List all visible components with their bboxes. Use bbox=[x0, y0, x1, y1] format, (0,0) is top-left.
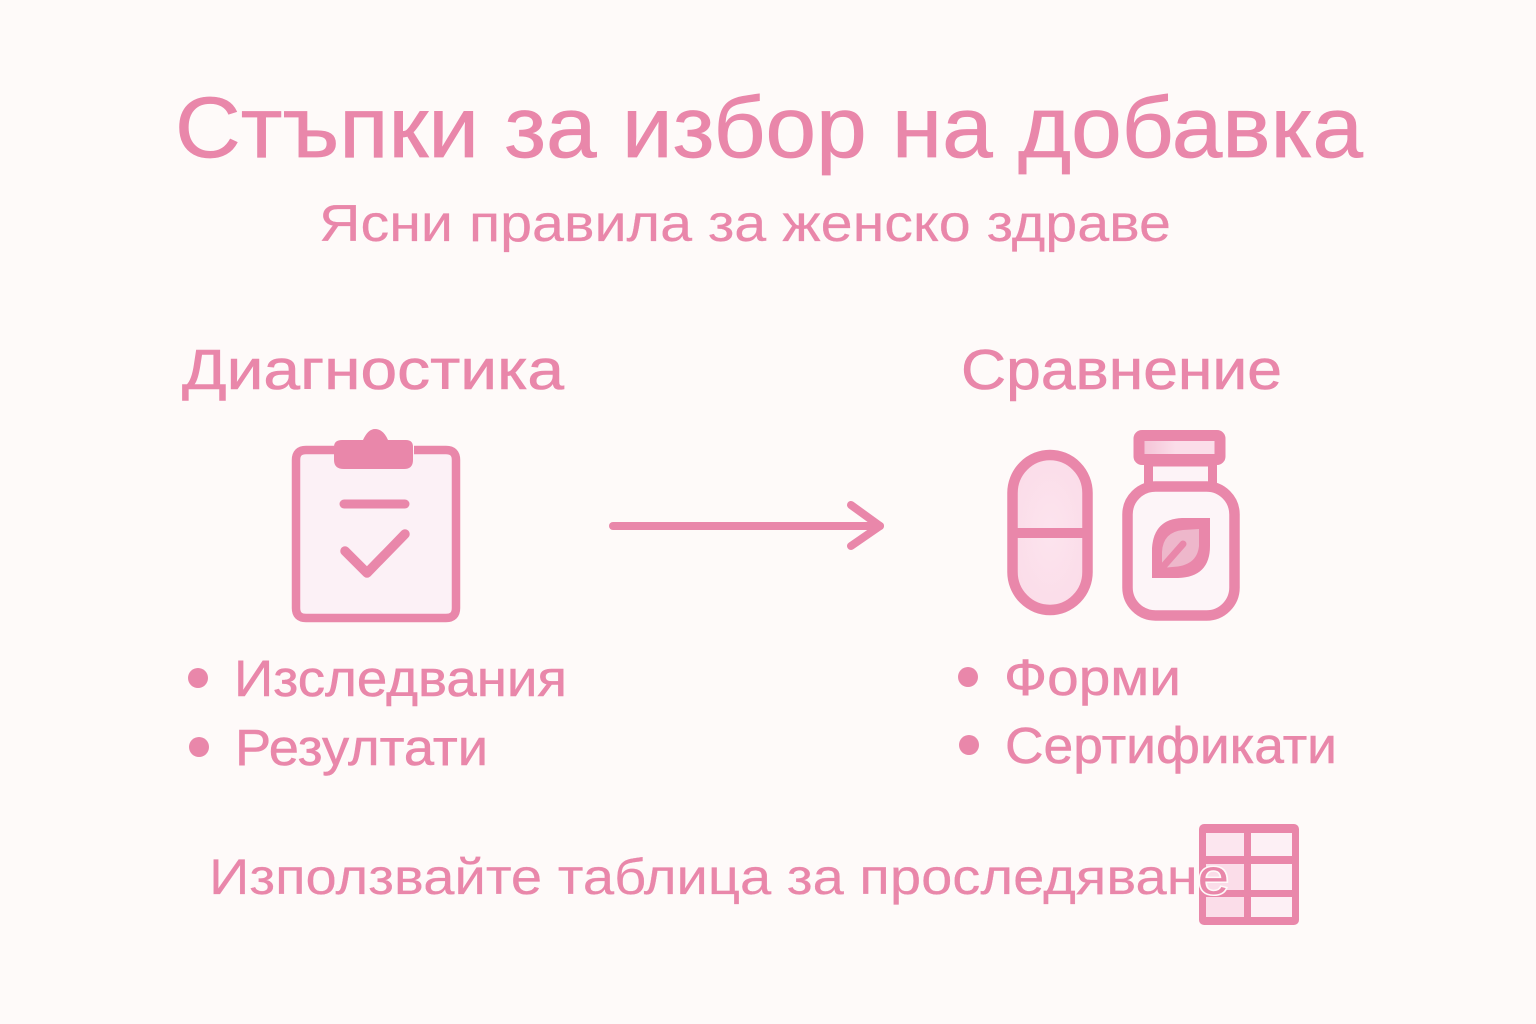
list: comparison: Сертификати bbox=[1005, 717, 1337, 774]
icon: clipboard bbox=[296, 429, 456, 618]
arrow bbox=[613, 505, 880, 546]
list: comparison: Форми bbox=[1004, 649, 1181, 706]
icon: table bbox=[1199, 824, 1299, 925]
list: diagnostics: Резултати bbox=[235, 719, 488, 776]
icon: leaf bbox=[1152, 518, 1210, 578]
heading: diagnostics: Диагностика bbox=[182, 338, 564, 402]
list: diagnostics: Изследвания bbox=[234, 650, 567, 707]
subtitle: Ясни правила за женско здраве bbox=[319, 195, 1171, 253]
icon: capsule bbox=[1012, 455, 1088, 610]
heading: comparison: Сравнение bbox=[961, 338, 1282, 402]
list: diagnostics bbox=[188, 650, 567, 776]
footer note: Използвайте таблица за проследяван е bbox=[209, 849, 1229, 905]
list: comparison bbox=[958, 649, 1337, 774]
title: Стъпки за избор на добавка bbox=[175, 80, 1363, 176]
icon: supplement bottle bbox=[1128, 436, 1234, 616]
